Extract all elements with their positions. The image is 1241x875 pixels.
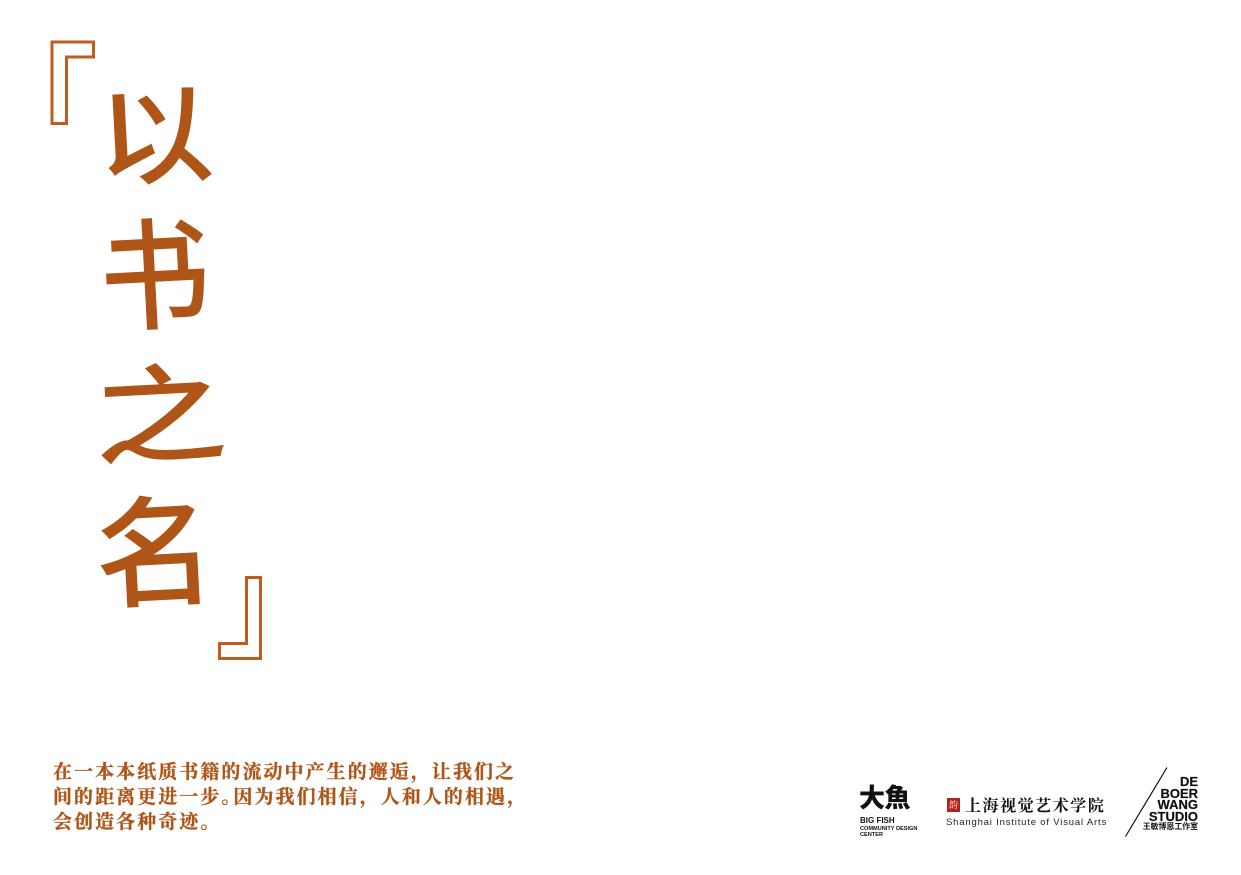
title [90,75,230,625]
logo: De Boer Wang Studio: 王敏博恩工作室 [1143,822,1198,831]
diagonal slash [1125,767,1168,837]
title character: 以: 以 [94,75,216,201]
logo: De Boer Wang Studio: BOER [1160,786,1198,800]
logo: Shanghai Institute of Visual Arts: Shanghai Institute of Visual Arts [946,817,1107,828]
title character: 之: 之 [90,354,230,480]
description text block: 间的距离更进一步。因为我们相信，人和人的相遇， [53,787,528,808]
title character: 名: 名 [92,485,218,625]
icon: red seal [947,798,960,812]
logo: Big Fish Community Design Center: CENTER [860,832,883,838]
logo: Shanghai Institute of Visual Arts: 上海视觉艺术学院 [965,798,1105,815]
logo: Big Fish Community Design Center [859,783,918,838]
logo: De Boer Wang Studio: DE [1180,774,1198,789]
description text block: 在一本本纸质书籍的流动中产生的邂逅，让我们之 [53,762,516,783]
description text block [53,762,528,833]
logo: Big Fish Community Design Center: 大魚 [859,783,910,813]
description text block: 会创造各种奇迹。 [53,812,221,833]
title character: 书: 书 [96,208,214,348]
logo: De Boer Wang Studio [1125,767,1198,837]
logo: De Boer Wang Studio: STUDIO [1149,808,1198,824]
logo: De Boer Wang Studio: WANG [1158,797,1198,812]
logo: Big Fish Community Design Center: COMMUNITY DESIGN [860,826,917,832]
logo: Big Fish Community Design Center: BIG FISH [860,816,895,825]
icon: red seal: 韵 [949,798,958,811]
logo: Shanghai Institute of Visual Arts [946,797,1107,828]
icon: closing corner bracket [218,576,262,660]
icon: opening corner bracket [50,40,95,125]
